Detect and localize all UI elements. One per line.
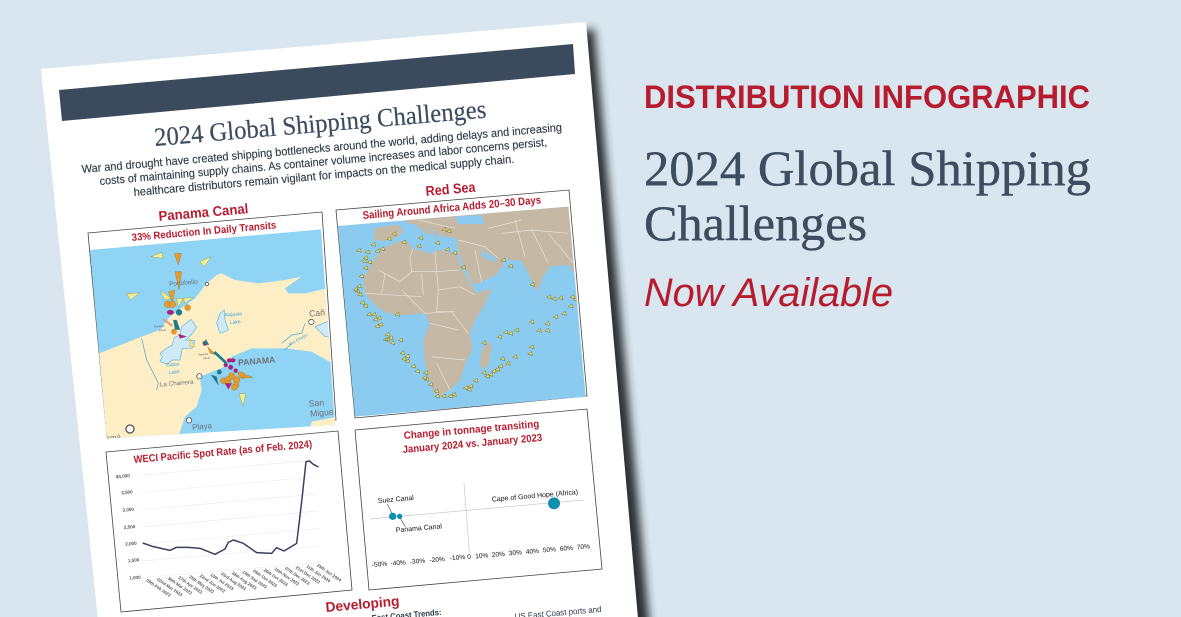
- chart title: January 2024 vs. January 2023: [402, 432, 543, 456]
- map labels: Portobello: [169, 278, 198, 288]
- x axis ticks: [372, 543, 590, 569]
- y axis labels: 1,500: [128, 557, 140, 563]
- africa land: [363, 242, 492, 397]
- x axis ticks: -50%: [372, 561, 388, 569]
- map labels: Panama: [154, 324, 165, 329]
- panel: tilted document page: [41, 22, 639, 617]
- bottom text fragments: [371, 604, 602, 617]
- map labels: Río Chepo: [288, 332, 309, 347]
- europe and asia land: [374, 225, 403, 241]
- map labels: Gatun: [166, 361, 180, 369]
- map labels: Panama: [198, 352, 209, 357]
- shipping traffic: [127, 252, 253, 406]
- x axis ticks: 20%: [492, 551, 505, 559]
- x axis labels: 14th Sep 2023: [241, 569, 268, 590]
- map labels: La Charrera: [160, 379, 194, 389]
- y axis labels: 2,000: [125, 541, 137, 547]
- map labels: Alajuela: [224, 311, 242, 319]
- y axis labels: 3,500: [121, 489, 133, 495]
- x axis ticks: 30%: [509, 549, 522, 557]
- map labels: San: [308, 397, 325, 409]
- bubble labels: Panama Canal: [396, 523, 443, 534]
- panel subtitle: 33% Reduction In Daily Transits: [131, 219, 277, 244]
- heading: panama canal: Panama Canal: [158, 200, 249, 224]
- map labels: Canal: [203, 356, 210, 360]
- y axis labels: 1,000: [129, 575, 141, 581]
- x axis ticks: 50%: [543, 546, 556, 554]
- intro paragraph: costs of maintaining supply chains. As container volume increases and labor concerns persist,: [99, 137, 548, 188]
- map labels: Canal: [159, 328, 166, 332]
- map: panama: [85, 220, 338, 443]
- y axis labels: 3,000: [122, 507, 135, 513]
- spot rate line: [143, 461, 318, 554]
- map labels: Cañ: [309, 307, 326, 319]
- x axis labels: 02nd Mar 2023: [156, 577, 184, 598]
- x axis ticks: -40%: [390, 559, 406, 568]
- map labels: PANAMA: [238, 354, 276, 368]
- x axis labels: 16th Nov 2023: [273, 566, 301, 587]
- x axis labels: 03rd Aug 2023: [220, 571, 248, 592]
- page title: 2024 Global Shipping Challenges: [153, 95, 487, 152]
- x axis labels: 27th Apr 2023: [177, 575, 204, 595]
- bubble labels: Cape of Good Hope (Africa): [492, 489, 578, 504]
- page sheet: [41, 22, 639, 617]
- panel: change in tonnage chart: [355, 409, 602, 590]
- map: africa: [335, 200, 592, 420]
- bubble labels: [378, 489, 578, 534]
- map labels: Playa: [192, 421, 213, 432]
- x axis labels: 07th Dec 2023: [284, 566, 311, 586]
- panel: red sea map: [335, 190, 592, 420]
- country borders: [365, 220, 573, 390]
- x axis ticks: 0: [467, 554, 471, 561]
- label: distribution infographic: DISTRIBUTION INFOGRAPHIC: [644, 79, 1090, 115]
- bubble chart: [370, 483, 590, 569]
- panel: right text block: [644, 79, 1091, 315]
- panel: WECI line chart: [106, 431, 352, 612]
- map labels: Lake: [230, 319, 241, 326]
- intro paragraph: War and drought have created shipping bottlenecks around the world, adding delays and increasing: [81, 122, 562, 176]
- heading: red sea: Red Sea: [425, 179, 476, 199]
- x axis labels: 25th Jan 2024: [316, 563, 343, 583]
- heading: 2024 Global Shipping Challenges: 2024 Global Shipping: [644, 140, 1091, 196]
- bubble labels: Suez Canal: [378, 495, 415, 505]
- x axis labels: 24th Aug 2023: [231, 570, 258, 591]
- x axis ticks: -10%: [450, 554, 466, 562]
- x axis ticks: 60%: [560, 545, 573, 553]
- chart title: [402, 418, 543, 456]
- x axis labels: 05th Oct 2023: [252, 568, 278, 588]
- x axis labels: [145, 563, 343, 598]
- chart title: WECI Pacific Spot Rate (as of Feb. 2024): [133, 438, 313, 466]
- x axis labels: 26th Oct 2023: [263, 567, 289, 587]
- map labels: [105, 278, 336, 443]
- map labels: Lake: [169, 369, 180, 376]
- page shadow: [500, 28, 650, 617]
- x axis ticks: 10%: [475, 552, 489, 560]
- x axis ticks: 40%: [526, 548, 539, 556]
- map labels: Miguel: [310, 406, 336, 419]
- intro paragraph: [81, 122, 562, 199]
- ship clusters: [353, 227, 578, 398]
- x axis labels: 13th Jul 2023: [209, 572, 235, 592]
- x axis labels: 25th May 2023: [188, 574, 215, 595]
- x axis ticks: -30%: [410, 558, 426, 566]
- bubbles: [389, 497, 560, 520]
- chart title: Change in tonnage transiting: [403, 418, 540, 442]
- line chart: [116, 460, 343, 598]
- y axis labels: [116, 473, 141, 581]
- x axis labels: 22nd Jun 2023: [199, 573, 227, 594]
- x axis labels: 30th Mar 2023: [167, 576, 194, 596]
- y axis labels: 2,500: [124, 524, 136, 530]
- panel subtitle: Sailing Around Africa Adds 20–30 Days: [362, 194, 542, 222]
- y axis labels: $4,000: [116, 473, 130, 479]
- x axis ticks: 70%: [577, 543, 590, 551]
- heading: developing: Developing: [325, 593, 400, 615]
- x axis labels: 21st Dec 2023: [295, 565, 322, 585]
- x axis labels: 11th Jan 2024: [305, 564, 332, 584]
- x axis labels: 09th Feb 2023: [145, 578, 172, 598]
- tagline: now available: Now Available: [644, 271, 893, 315]
- map labels: amá: [105, 433, 122, 443]
- heading: 2024 Global Shipping Challenges: Challenges: [644, 195, 867, 251]
- panel: panama canal map: [85, 212, 338, 443]
- intro paragraph: healthcare distributors remain vigilant for impacts on the medical supply chain.: [133, 154, 515, 199]
- x axis ticks: -20%: [429, 556, 445, 564]
- header bar: [59, 44, 575, 121]
